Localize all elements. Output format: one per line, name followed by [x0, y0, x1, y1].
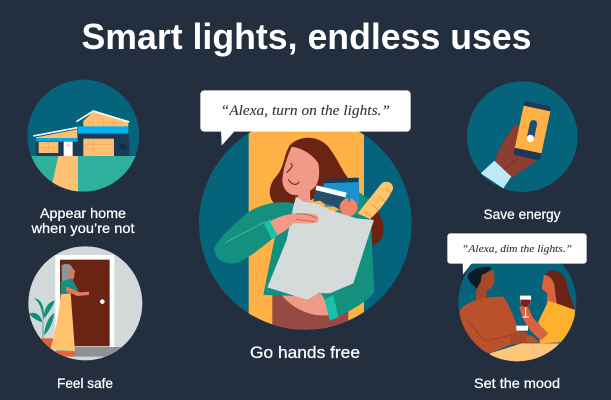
panel: go hands free illustration — [197, 90, 417, 333]
label: feel safe: Feel safe — [57, 375, 113, 391]
label: save energy: Save energy — [484, 206, 560, 222]
house body — [36, 140, 129, 156]
woman — [62, 264, 74, 282]
table — [490, 343, 560, 362]
panel: feel safe illustration — [27, 245, 147, 362]
wine glass — [520, 296, 531, 307]
title: Smart lights, endless uses — [82, 16, 532, 57]
sweater — [214, 192, 374, 320]
phone — [513, 101, 551, 161]
label: set the mood: Set the mood — [474, 375, 560, 391]
label: go hands free: Go hands free — [250, 343, 360, 362]
plant — [29, 298, 55, 335]
panel: set the mood illustration — [447, 233, 587, 365]
woman — [544, 270, 575, 308]
speech bubble: “Alexa, dim the lights.” — [462, 244, 572, 255]
lawn — [31, 156, 136, 192]
panel: appear home illustration — [27, 80, 140, 192]
paper bag — [267, 197, 374, 301]
speech bubble: “Alexa, turn on the lights.” — [221, 103, 390, 119]
panel: save energy illustration — [467, 81, 578, 192]
speech bubble — [200, 90, 411, 146]
face and neck — [282, 147, 319, 205]
label: when you're not: when you’re not — [30, 220, 135, 236]
hand — [495, 125, 538, 180]
label: appear home: Appear home — [40, 205, 126, 221]
hair — [270, 138, 348, 204]
groceries — [323, 178, 359, 207]
glass on table — [516, 326, 528, 331]
man — [476, 270, 495, 300]
pants — [272, 295, 348, 330]
hands — [270, 213, 319, 235]
cuff — [481, 161, 511, 188]
